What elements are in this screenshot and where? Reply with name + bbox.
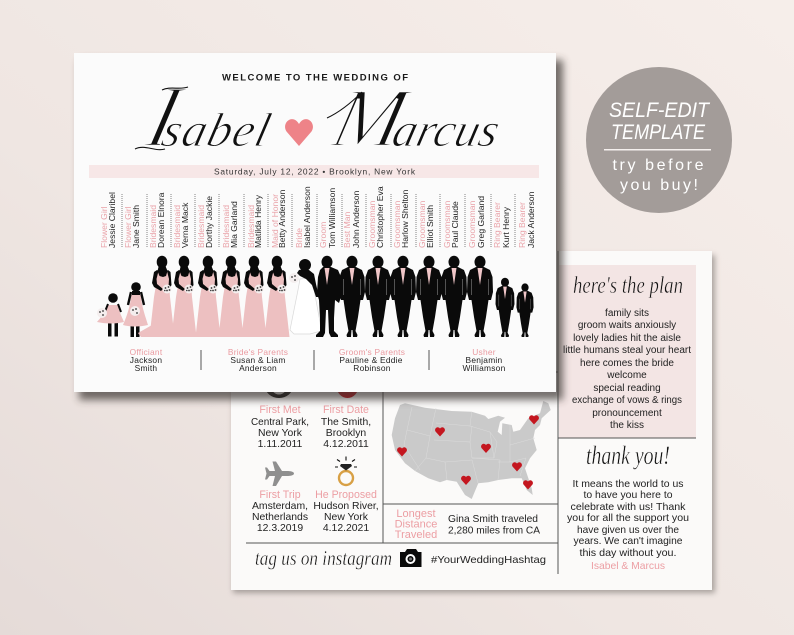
text: first met: Central Park, (251, 417, 309, 428)
wedding party names: Bridesmaid (148, 205, 158, 248)
heading: here's the plan: here's the plan (573, 273, 683, 299)
text: first date: Brooklyn (326, 428, 366, 439)
text: ceremony order (563, 308, 691, 431)
wedding party names: Groomsman (367, 201, 377, 248)
wedding party names: Jane Smith (131, 205, 141, 248)
wedding party names: Jessie Claribel (107, 192, 117, 248)
text: signature: Isabel & Marcus (591, 561, 665, 572)
text: first met: 1.11.2011 (258, 439, 303, 450)
text: longest distance label: Longest (396, 508, 436, 520)
wedding party names: Christopher Eva (375, 186, 385, 248)
bridesmaid 5 (242, 256, 266, 337)
groom's parents (339, 347, 405, 373)
text: first trip: First Trip (259, 489, 301, 501)
text: longest distance value: Gina Smith traveled (448, 514, 538, 525)
wedding party names: Bride (294, 228, 304, 248)
groom's parents: Pauline & Eddie (339, 355, 403, 365)
bridesmaid 1 (150, 256, 174, 337)
text: ceremony order: the kiss (610, 420, 644, 431)
officiant: Smith (135, 363, 157, 373)
text: ceremony order: little humans steal your heart (563, 345, 691, 356)
wedding party names: Greg Garland (476, 196, 486, 248)
text: he proposed: New York (324, 512, 369, 523)
text: first date (321, 404, 371, 450)
text: ceremony order: exchange of vows & rings (572, 395, 682, 406)
groomsman 2 (390, 256, 416, 337)
text: he proposed: 4.12.2021 (323, 523, 369, 534)
wedding party names: Groomsman (417, 201, 427, 248)
wedding party names: Flower Girl (123, 206, 133, 248)
wedding party names: Bridesmaid (172, 205, 182, 248)
text: first date: 4.12.2011 (323, 439, 369, 450)
heading: thank you: thank you! (586, 441, 670, 470)
text: longest distance value: 2,280 miles from CA (448, 526, 540, 536)
bridesmaid 4 (218, 256, 244, 337)
wedding party names: Groomsman (442, 201, 452, 248)
wedding party names: Dorean Elnora (156, 192, 166, 248)
wedding party names: Matilda Henry (253, 194, 263, 248)
flower girl 2 (123, 282, 148, 337)
icon: map hearts (397, 415, 539, 490)
map: guest origins (392, 401, 551, 499)
bridesmaid 2 (172, 256, 196, 337)
text: thank you message (567, 479, 689, 559)
bride (289, 259, 321, 334)
best man (339, 256, 365, 337)
usher: Williamson (462, 363, 506, 373)
groomsman 5 (467, 256, 493, 337)
flower girl 1 (97, 293, 124, 336)
ring bearer 2 (516, 283, 534, 337)
badge heading: SELF-EDIT (609, 99, 711, 122)
text: first trip: Amsterdam, (252, 501, 308, 512)
groom's parents: Groom's Parents (339, 347, 405, 357)
groom (316, 256, 341, 337)
badge: self-edit template (586, 67, 732, 213)
bride's parents: Bride's Parents (228, 347, 288, 357)
wedding party names: Verna Mack (180, 202, 190, 248)
train of first bridesmaid (138, 325, 172, 337)
usher (462, 347, 506, 373)
wedding party names: Bridesmaid (221, 205, 231, 248)
text: first met (251, 404, 309, 450)
text: tag us on instagram: tag us on instagram (255, 546, 392, 570)
icon: airplane (265, 462, 294, 486)
text: first date: First Date (323, 404, 369, 416)
silhouettes: bridal party (97, 256, 534, 337)
icon: heart (285, 119, 313, 146)
wedding party names: Elliot Smith (425, 205, 435, 248)
panel: here's the plan (559, 265, 696, 438)
wedding party names: Harlow Shelton (400, 190, 410, 248)
text: longest distance label: Traveled (395, 529, 437, 541)
bride's parents: Susan & Liam (230, 355, 286, 365)
text: he proposed: He Proposed (315, 489, 377, 501)
usher: Usher (472, 347, 496, 357)
text: thank you message: this day without you. (580, 548, 676, 559)
wedding party names: Dorthy Jackie (204, 196, 214, 248)
text: thank you message: you for all the support you (567, 513, 689, 524)
name: Marcus: Marcus (322, 72, 513, 165)
badge subtext: try before (612, 157, 704, 174)
icon: camera (400, 549, 422, 567)
name: Isabel: Isabel (136, 68, 286, 166)
text: first trip (252, 489, 308, 534)
wedding party names: Groomsman (392, 201, 402, 248)
officiant (130, 347, 163, 373)
text: thank you message: to have you here to (584, 490, 673, 501)
icon: first met (265, 374, 293, 398)
badge subtext (612, 157, 704, 194)
text: ceremony order: lovely ladies hit the aisle (573, 333, 681, 344)
text: first met: New York (258, 428, 303, 439)
wedding party names: Best Man (342, 211, 352, 248)
wedding party names: Bridesmaid (196, 205, 206, 248)
badge heading (609, 99, 711, 144)
icon: engagement ring (335, 456, 357, 485)
text: first trip: 12.3.2019 (257, 523, 303, 534)
text: ceremony order: family sits (605, 308, 649, 319)
bride's parents: Anderson (239, 363, 277, 373)
wedding party names: Bridesmaid (246, 205, 256, 248)
text: longest distance label: Distance (395, 518, 437, 530)
badge subtext: you buy! (620, 177, 698, 194)
wedding party names: Ring Bearer (517, 202, 527, 248)
bridesmaid 3 (196, 256, 220, 337)
wedding party names: Groom (318, 222, 328, 248)
wedding party names: Betty Anderson (277, 189, 287, 248)
text: he proposed (313, 489, 379, 534)
text: ceremony order: pronouncement (592, 408, 662, 419)
wedding party names: Paul Claude (450, 201, 460, 248)
wedding party names: Isabel Anderson (302, 186, 312, 248)
wedding party names: Maid of Honor (270, 194, 280, 248)
text: longest distance value (448, 514, 540, 536)
text: thank you message: celebrate with us! Thank (570, 502, 686, 513)
date band: Saturday, July 12, 2022 • Brooklyn, New York (214, 166, 416, 176)
wedding party names: Mia Garland (229, 201, 239, 248)
officiant: Jackson (130, 355, 162, 365)
text: ceremony order: special reading (593, 383, 661, 394)
text: first trip: Netherlands (252, 512, 308, 523)
text: ceremony order: here comes the bride (580, 358, 674, 369)
text: first met: First Met (259, 404, 301, 416)
officiant: Officiant (130, 347, 163, 357)
groomsman 1 (365, 256, 391, 337)
text: thank you message: It means the world to us (572, 479, 684, 490)
bride's parents (228, 347, 288, 373)
panel: thank you (567, 441, 689, 572)
text: thank you message: years. We can't imagine (574, 536, 683, 547)
text: first date: The Smith, (321, 417, 371, 428)
panel: back card (231, 251, 715, 593)
wedding party names: John Anderson (351, 190, 361, 248)
wedding party names: Ring Bearer (492, 202, 502, 248)
text: he proposed: Hudson River, (313, 501, 379, 512)
wedding party names: Tom Williamson (327, 188, 337, 248)
text: longest distance label (395, 508, 437, 541)
wedding party names: Flower Girl (99, 206, 109, 248)
maid of honor (264, 256, 290, 337)
wedding party names: Groomsman (467, 201, 477, 248)
date band (89, 165, 539, 178)
groomsman 3 (416, 256, 442, 337)
text: ceremony order: welcome (606, 370, 647, 381)
usher: Benjamin (466, 355, 503, 365)
text: thank you message: have given us over the (577, 525, 679, 536)
text: ceremony order: groom waits anxiously (578, 320, 676, 331)
panel: main card (74, 53, 563, 400)
wedding party names: Kurt Henry (501, 206, 511, 248)
text: hashtag: #YourWeddingHashtag (431, 555, 546, 566)
icon: first date (336, 374, 358, 398)
wedding party names: Jack Anderson (526, 191, 536, 248)
groom's parents: Robinson (353, 363, 391, 373)
groomsman 4 (441, 256, 467, 337)
ring bearer 1 (496, 278, 514, 337)
wedding party names (99, 186, 536, 248)
heading: welcome: WELCOME TO THE WEDDING OF (222, 72, 408, 84)
badge heading: TEMPLATE (611, 121, 706, 144)
